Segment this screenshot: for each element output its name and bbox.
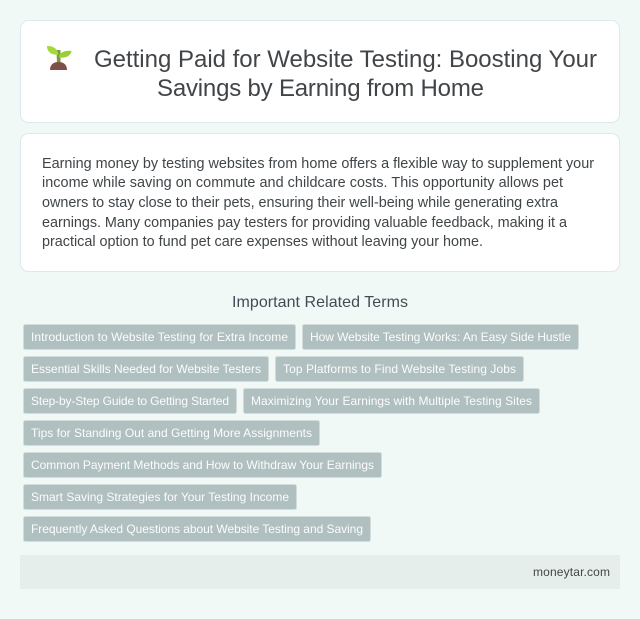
tag (302, 324, 578, 350)
panel: description card: owners to stay close to their pets, ensuring their well-being while generating extra (42, 195, 558, 211)
tag: Step-by-Step Guide to Getting Started (31, 394, 229, 408)
tag (24, 388, 236, 414)
icon: sprout (47, 46, 72, 70)
heading: related terms: Important Related Terms (232, 294, 408, 311)
tag (244, 388, 540, 414)
tag: Tips for Standing Out and Getting More Assignments (31, 426, 312, 440)
tag: Top Platforms to Find Website Testing Jobs (283, 362, 516, 376)
tag list (24, 324, 578, 542)
tag: Maximizing Your Earnings with Multiple Testing Sites (251, 394, 532, 408)
title: Savings by Earning from Home (157, 75, 484, 102)
panel: description card: income while saving on commute and childcare costs. This opportunity allows pet (42, 175, 563, 191)
tag: Introduction to Website Testing for Extra Income (31, 330, 288, 344)
tag: Common Payment Methods and How to Withdraw Your Earnings (31, 458, 374, 472)
footer: moneytar.com (533, 565, 610, 579)
tag (276, 356, 524, 382)
panel: description card: Earning money by testing websites from home offers a flexible way to supplement your (42, 156, 594, 172)
tag (24, 356, 268, 382)
panel: description card (20, 134, 620, 272)
tag: How Website Testing Works: An Easy Side Hustle (310, 330, 571, 344)
tag (24, 324, 296, 350)
panel: description card: practical option to fund pet care expenses without leaving your home. (42, 234, 483, 250)
tag (24, 452, 382, 478)
title: Getting Paid for Website Testing: Boosting Your (94, 46, 597, 73)
tag (24, 484, 296, 510)
tag: Frequently Asked Questions about Website Testing and Saving (31, 522, 363, 536)
tag (24, 420, 320, 446)
footer (20, 555, 620, 589)
tag: Essential Skills Needed for Website Testers (31, 362, 261, 376)
panel: title card (20, 20, 620, 122)
title (94, 46, 597, 102)
tag: Smart Saving Strategies for Your Testing Income (31, 490, 289, 504)
panel: description card: earnings. Many companies pay testers for providing valuable feedback, making it a (42, 215, 567, 231)
tag (24, 516, 370, 542)
